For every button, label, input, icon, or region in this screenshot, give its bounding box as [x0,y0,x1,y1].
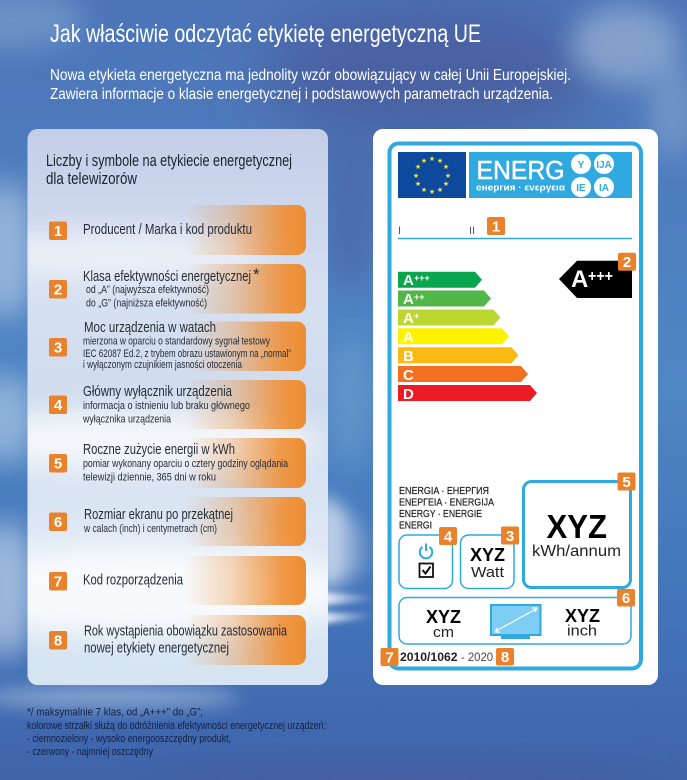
legend row 4: main switch: 4 [54,397,63,414]
badge 5: 5 [622,474,631,491]
icon: EU flag: ★ [415,180,421,188]
multilingual energy text: ENERGY · ENERGIE [399,509,482,520]
icon: EU flag: ★ [413,172,419,180]
box: power in watts: Watt [471,564,505,581]
legend row 4: main switch: wyłącznika urządzenia [82,414,172,426]
label header: ENERG: енергия · ενεργεια [476,182,566,192]
legend row 7: regulation code [49,556,306,605]
icon: EU flag: ★ [429,188,435,196]
legend row 7: regulation code: 7 [54,574,62,590]
label header: ENERG: Y [578,160,585,171]
label header: ENERG [469,152,632,198]
box: screen size [399,598,631,644]
efficiency scale arrows: +++ [414,273,430,283]
box: annual consumption [524,482,630,588]
icon: checkbox [420,564,433,577]
multilingual energy text: ENERGI [399,520,432,532]
badge 4 [439,527,457,546]
box: power in watts: XYZ [470,545,505,565]
box: power switch [399,535,452,588]
legend row 4: main switch [49,380,306,429]
label header: ENERG: IE [576,183,586,194]
legend row 6: screen size: 6 [54,514,62,531]
legend row 7: regulation code: Kod rozporządzenia [83,572,184,588]
badge 1: 1 [492,218,500,236]
badge 5 [618,472,636,491]
regulation code and year [400,652,493,664]
box: screen size: cm [433,624,454,641]
footnote: kolorowe strzałki służą do odróżnienia efektywności energetycznej urządzeń: [27,720,326,732]
efficiency scale arrows: A [403,272,414,289]
badge 2: 2 [623,254,631,271]
legend row 2: efficiency class: Klasa efektywności energetycznej [83,269,251,285]
icon: EU flag: ★ [437,186,443,194]
legend row 2: efficiency class: 2 [54,282,62,298]
badge 6 [617,589,635,607]
icon: power symbol [420,544,432,558]
icon: EU flag: ★ [443,163,449,171]
legend row 8: year: 8 [54,632,62,650]
legend row 1: producer [49,205,306,255]
badge 3 [501,526,519,545]
efficiency scale arrows: C [403,367,414,384]
legend row 4: main switch: Główny wyłącznik urządzenia [83,384,233,400]
icon: EU flag: ★ [443,180,449,188]
legend row 6: screen size: w calach (inch) i centymetrach (cm) [83,523,217,535]
footnote: - czerwony - najmniej oszczędny [27,746,153,758]
badge 8: 8 [501,649,509,666]
multilingual energy text: ENERGIA · ЕНЕРГИЯ [399,486,489,497]
legend row 5: annual consumption: pomiar wykonany oparciu o cztery godziny oglądania [83,458,289,470]
supplier and model line: II [469,225,475,237]
badge 3: 3 [506,528,514,545]
icon: EU flag: ★ [437,157,443,165]
legend row 3: power [49,320,306,371]
box: annual consumption: XYZ [546,508,607,545]
label header: ENERG: IA [599,183,609,194]
efficiency scale arrows: A [403,291,414,308]
icon: EU flag: ★ [421,186,427,194]
legend row 5: annual consumption [49,438,306,488]
badge 1 [487,217,505,236]
box: screen size: XYZ [426,607,461,627]
icon: EU flag: ★ [421,157,427,165]
legend row 8: year [49,615,306,665]
intro text [50,67,571,103]
badge 4: 4 [444,528,453,546]
legend row 6: screen size [49,497,306,546]
badge 6: 6 [622,590,630,607]
legend row 1: producer: Producent / Marka i kod produktu [83,222,252,238]
regulation code and year: 2010/1062 [400,652,458,664]
multilingual energy text [399,486,494,532]
intro text: Nowa etykieta energetyczna ma jednolity wzór obowiązujący w całej Unii Europejskiej. [50,67,571,84]
efficiency scale arrows: A [403,310,414,327]
efficiency scale arrows: A [403,329,414,346]
icon: TV screen [491,605,540,639]
badge 8 [496,648,514,666]
legend row 3: power: i wyłączonym czujnikiem jasności otoczenia [83,359,243,371]
efficiency scale arrows: D [403,386,414,403]
class arrow: A+++: A [571,266,588,293]
regulation code and year: - 2020 [461,652,493,664]
panel: symbols legend [28,129,328,685]
legend row 2: efficiency class [49,264,306,314]
legend row 5: annual consumption: 5 [54,456,62,472]
legend row 3: power: mierzona w oparciu o standardowy sygnał testowy [83,336,270,348]
supplier and model line [398,225,632,238]
efficiency scale arrows: ++ [414,292,425,302]
panel heading [46,151,292,188]
class arrow: A+++: +++ [588,268,613,285]
icon: EU flag: ★ [445,172,451,180]
box: screen size: inch [567,622,597,640]
legend row 3: power: IEC 62087 Ed.2, z trybem obrazu ustawionym na „normal” [83,348,291,360]
title: Jak właściwie odczytać etykietę energetyczną UE [50,20,481,48]
legend row 2: efficiency class: * [253,265,260,284]
panel heading: Liczby i symbole na etykiecie energetycznej [46,151,292,170]
badge 2 [618,253,636,271]
legend row 6: screen size: Rozmiar ekranu po przekątnej [84,507,233,523]
footnote [27,706,326,758]
footnote: */ maksymalnie 7 klas, od „A+++” do „G”; [27,706,203,718]
panel heading: dla telewizorów [46,169,138,188]
box: annual consumption: kWh/annum [532,543,621,560]
panel: energy label card [373,129,658,685]
efficiency scale arrows: + [414,311,419,321]
efficiency scale arrows [398,272,537,403]
intro text: Zawiera informacje o klasie energetycznej i podstawowych parametrach urządzenia. [50,86,553,103]
legend row 8: year: Rok wystąpienia obowiązku zastosowania [84,624,288,640]
legend row 4: main switch: informacja o istnieniu lub braku głównego [83,400,250,412]
legend row 2: efficiency class: od „A” (najwyższa efektywność) [86,284,209,296]
box: screen size: XYZ [565,606,600,626]
supplier and model line: I [398,225,401,237]
icon: EU flag: ★ [415,163,421,171]
legend row 5: annual consumption: Roczne zużycie energii w kWh [83,442,235,458]
box: power in watts [460,535,514,588]
icon: EU flag [398,152,466,198]
legend row 5: annual consumption: telewizji dziennie, 365 dni w roku [83,472,216,484]
badge 7: 7 [385,650,394,666]
badge 7 [380,648,398,666]
label header: ENERG: ENERG [476,155,564,185]
label frame [390,144,641,668]
legend row 3: power: Moc urządzenia w watach [84,320,216,336]
label header: ENERG: IJA [596,160,612,171]
efficiency scale arrows: B [403,348,414,365]
legend row 1: producer: 1 [54,223,62,240]
icon: EU flag: ★ [429,155,435,163]
legend row 3: power: 3 [54,340,62,356]
class arrow: A+++ [559,261,632,298]
legend row 2: efficiency class: do „G” (najniższa efektywność) [86,298,207,310]
legend row 8: year: nowej etykiety energetycznej [84,640,229,656]
multilingual energy text: ΕΝΕΡΓΕΙΑ · ENERGIJA [399,498,494,508]
footnote: - ciemnozielony - wysoko energooszczędny produkt, [27,733,231,745]
